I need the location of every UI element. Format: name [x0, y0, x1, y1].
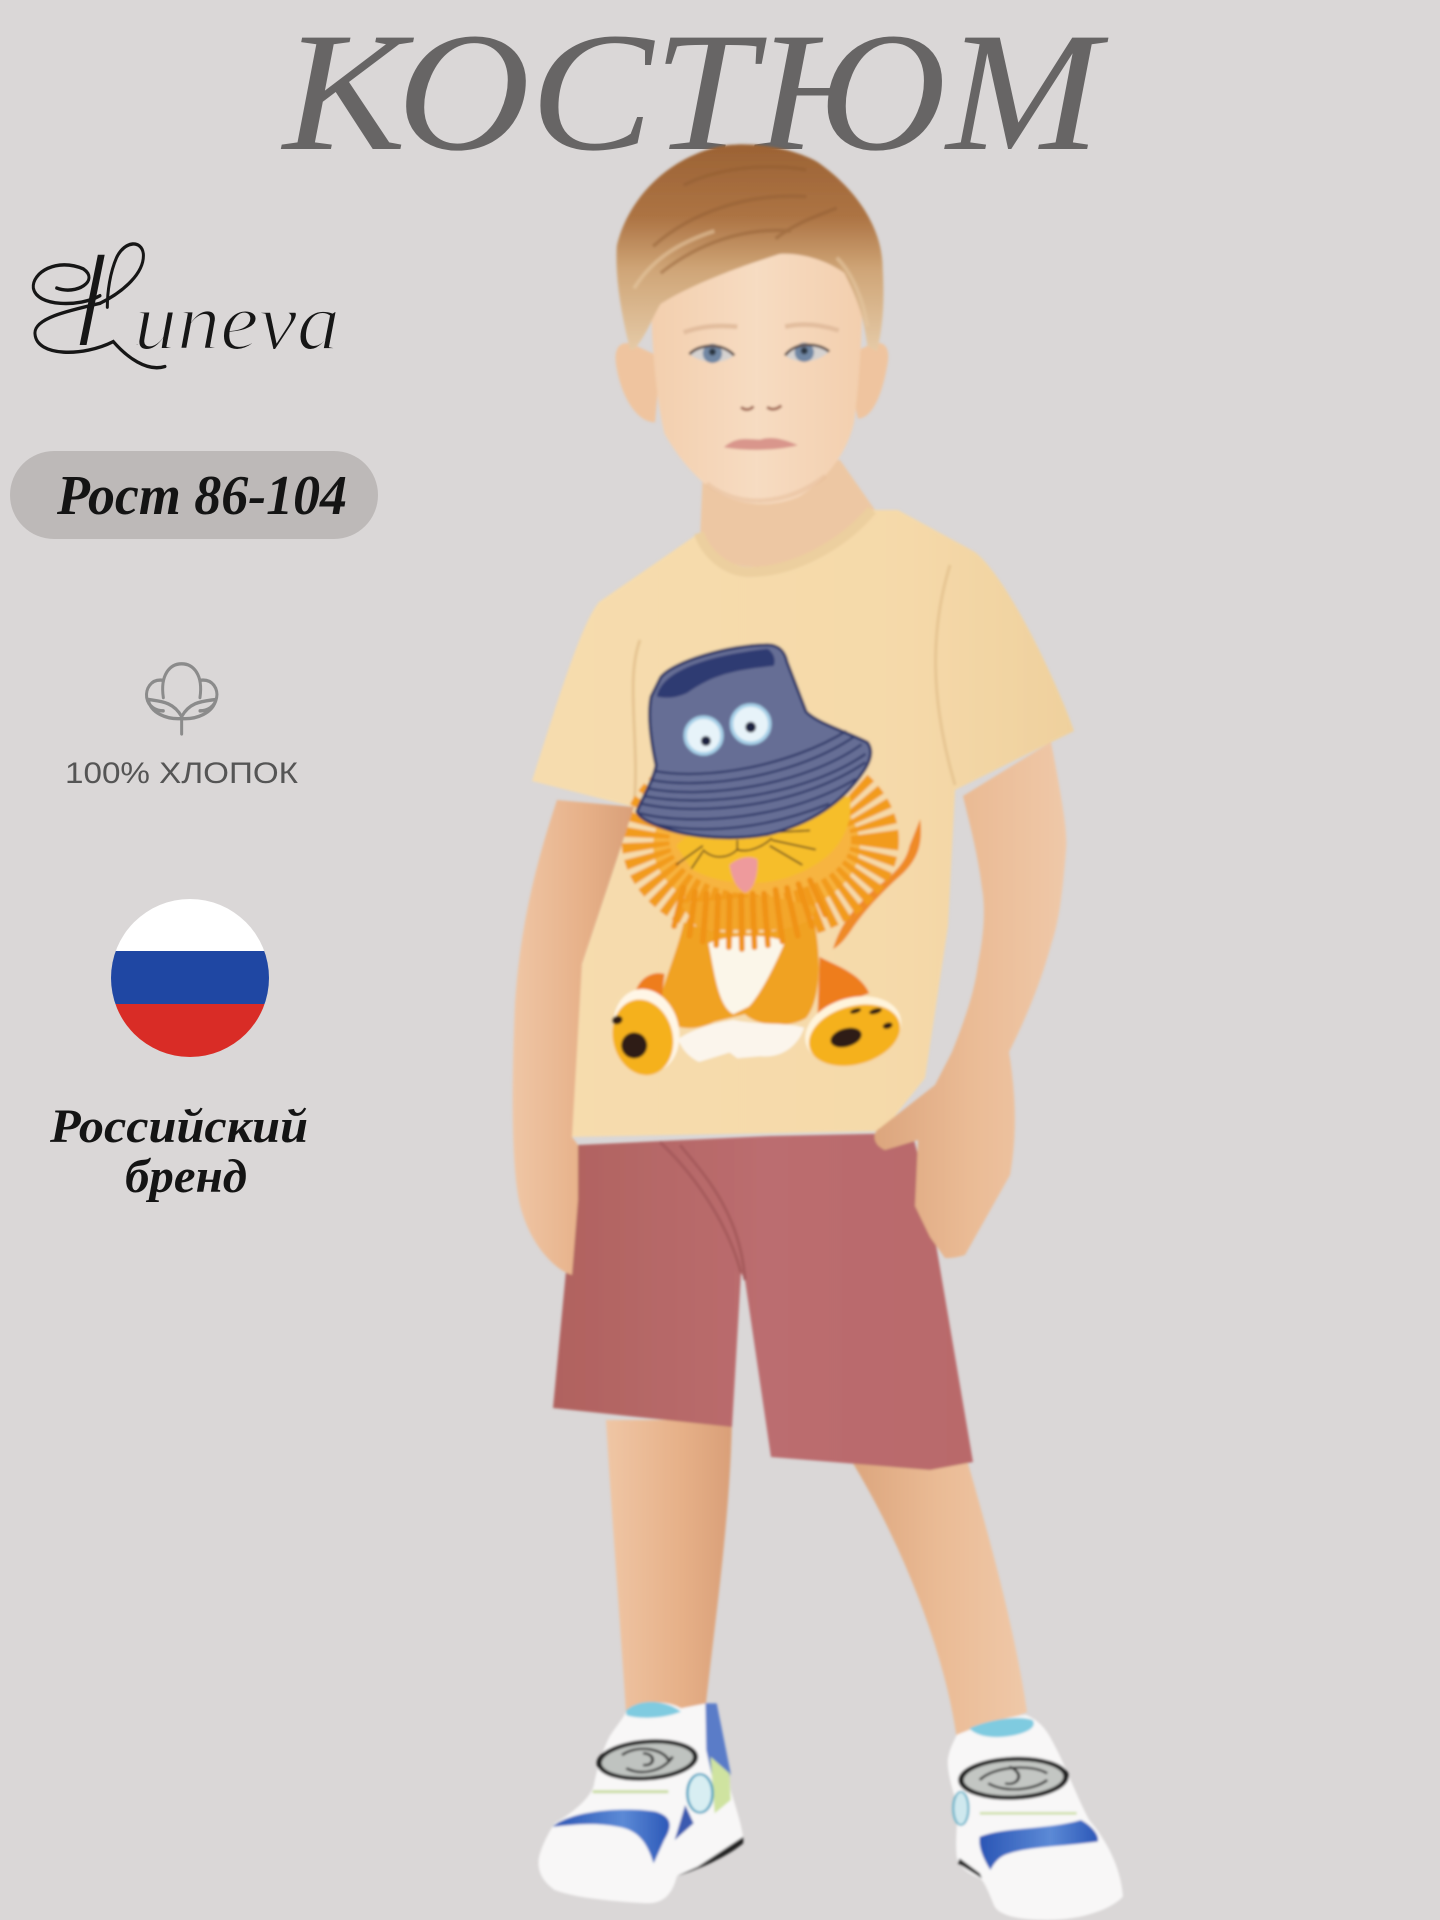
- hat brim stitching: [640, 731, 865, 829]
- boy model photo illustration: [513, 144, 1123, 1920]
- eyebrows: [684, 325, 839, 332]
- t-shirt: [532, 510, 1074, 1137]
- lion lower mane rays over the body: [674, 880, 825, 949]
- height pill: Рост 86-104: [56, 465, 347, 527]
- shorts: [553, 1133, 973, 1470]
- head: [616, 144, 888, 504]
- title: КОСТЮМ: [281, 0, 1109, 186]
- shorts folds: [660, 1142, 745, 1280]
- right eye: [785, 343, 829, 362]
- brand origin text: Российский: [49, 1100, 308, 1153]
- lion face: [676, 796, 851, 883]
- chin shading: [707, 476, 825, 501]
- infographic canvas: [10, 36, 1124, 1920]
- icon: Russian flag: [111, 899, 269, 1057]
- brand logo: Luneva: uneva: [134, 276, 340, 367]
- neck: [700, 460, 875, 567]
- right shoe: [948, 1715, 1123, 1920]
- brand logo: Luneva: L: [60, 216, 157, 382]
- face: [651, 235, 862, 504]
- lion front paws: [678, 1020, 804, 1062]
- lion hat: [637, 645, 871, 838]
- mouth: [724, 438, 798, 450]
- hair: [616, 144, 883, 352]
- brand origin text: [49, 1100, 308, 1203]
- sleeve seams: [633, 565, 955, 807]
- hair streaks: [653, 167, 837, 273]
- right arm and hand: [875, 742, 1066, 1258]
- hat eyes: [685, 705, 770, 754]
- lion print: [602, 645, 921, 1082]
- hat top shading: [657, 649, 775, 698]
- lion left foot: [602, 982, 689, 1082]
- lion tail: [833, 819, 921, 949]
- left eye: [689, 344, 734, 363]
- icon: cotton boll: [147, 664, 217, 734]
- right leg: [851, 1460, 1027, 1740]
- lion chest: [709, 936, 785, 1014]
- left leg: [606, 1420, 732, 1712]
- brand logo: Luneva: [33, 216, 340, 382]
- ears: [616, 343, 661, 422]
- lion mane: [653, 775, 860, 917]
- lion right foot: [797, 986, 910, 1077]
- height pill: [10, 451, 378, 539]
- lion whiskers and mouth: [676, 830, 816, 869]
- lion haunches: [634, 973, 676, 1041]
- collar shadow: [699, 510, 872, 572]
- nose: [741, 405, 781, 410]
- left arm: [513, 800, 634, 1275]
- brand origin text: бренд: [125, 1150, 247, 1203]
- material label: 100% ХЛОПОК: [65, 757, 299, 790]
- left shoe: [538, 1702, 743, 1903]
- lion tongue: [730, 857, 757, 892]
- lion body: [659, 919, 819, 1028]
